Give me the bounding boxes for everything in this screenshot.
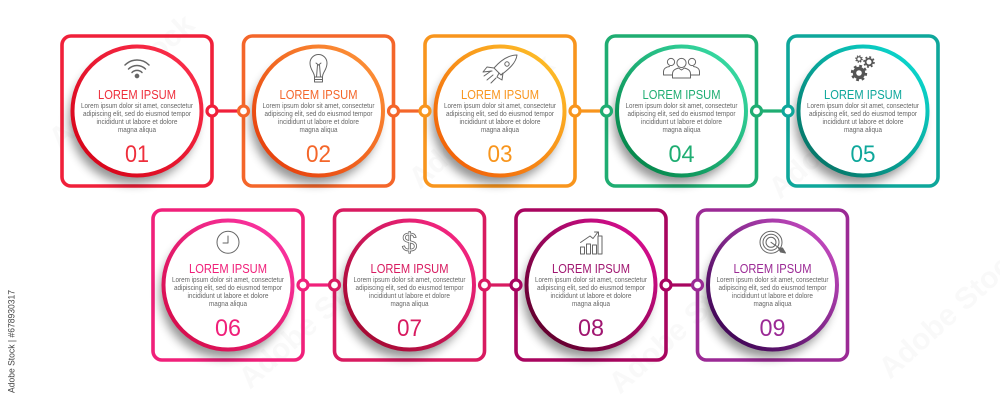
text block 07: magna aliqua — [390, 301, 429, 308]
icon: rocket — [483, 55, 517, 83]
text block 09: adipiscing elit, sed do eiusmod tempor — [718, 285, 827, 292]
connector 07 to 08 — [480, 280, 521, 290]
card frame 01 — [62, 36, 212, 186]
circle shadow 02 — [250, 56, 378, 184]
number 09: 09 — [760, 315, 786, 342]
text block 08 — [535, 277, 648, 308]
number 03: 03 — [488, 141, 512, 168]
icon: dollar: $ — [402, 228, 417, 258]
connector 04 to 05 — [752, 106, 793, 116]
text block 05: incididunt ut labore et dolore — [822, 119, 904, 126]
number 07: 07 — [397, 315, 422, 342]
text block 08: incididunt ut labore et dolore — [550, 293, 632, 300]
text block 01: magna aliqua — [118, 127, 156, 134]
icon: light bulb — [310, 54, 327, 82]
watermark: Adobe Stock — [403, 48, 561, 195]
card frame 08 — [516, 210, 666, 360]
text block 09: Lorem ipsum dolor sit amet, consectetur — [716, 277, 829, 284]
circle ring 02 — [254, 46, 383, 176]
text block 09 — [716, 277, 829, 308]
text block 01 — [81, 103, 194, 134]
panel: step 07 — [334, 210, 484, 360]
text block 02: incididunt ut labore et dolore — [278, 119, 359, 126]
text block 06: incididunt ut labore et dolore — [188, 293, 269, 300]
text block 04: adipiscing elit, sed do eiusmod tempor — [628, 111, 736, 118]
circle shadow 05 — [795, 56, 923, 184]
text block 02: adipiscing elit, sed do eiusmod tempor — [264, 111, 373, 118]
connector 08 to 09 — [661, 280, 702, 290]
circle shadow 07 — [342, 230, 470, 358]
text block 03: Lorem ipsum dolor sit amet, consectetur — [444, 103, 557, 110]
text block 05: adipiscing elit, sed do eiusmod tempor — [809, 111, 918, 118]
heading 04: LOREM IPSUM — [642, 87, 720, 102]
text block 07: adipiscing elit, sed do eiusmod tempor — [356, 285, 464, 292]
circle shadow 09 — [704, 230, 832, 358]
panel: step 03 — [425, 36, 575, 186]
circle ring 09 — [708, 220, 837, 350]
text block 03: incididunt ut labore et dolore — [460, 119, 541, 126]
icon: gears — [852, 56, 874, 80]
card frame 06 — [153, 210, 303, 360]
circle ring 01 — [72, 46, 202, 176]
text block 02: Lorem ipsum dolor sit amet, consectetur — [262, 103, 375, 110]
panel: step 05 — [788, 36, 938, 186]
text block 09: incididunt ut labore et dolore — [732, 293, 813, 300]
heading 01: LOREM IPSUM — [98, 87, 176, 102]
text block 04: magna aliqua — [662, 127, 701, 134]
text block 04: Lorem ipsum dolor sit amet, consectetur — [626, 103, 738, 110]
text block 04: incididunt ut labore et dolore — [641, 119, 722, 126]
circle shadow 03 — [432, 56, 560, 184]
icon: wifi — [125, 60, 149, 78]
circle shadow 08 — [523, 230, 651, 358]
connector 02 to 03 — [388, 106, 430, 116]
heading 05: LOREM IPSUM — [824, 87, 902, 102]
circle ring 06 — [164, 220, 292, 350]
text block 05: magna aliqua — [844, 127, 882, 134]
stock id caption: Adobe Stock | #678930317 — [6, 290, 16, 393]
text block 03 — [444, 103, 557, 134]
circle shadow 01 — [69, 56, 197, 184]
text block 02: magna aliqua — [300, 127, 338, 134]
text block 03: magna aliqua — [481, 127, 519, 134]
text block 07 — [354, 277, 466, 308]
panel: step 09 — [698, 210, 848, 360]
text block 08: adipiscing elit, sed do eiusmod tempor — [537, 285, 646, 292]
heading 02: LOREM IPSUM — [280, 87, 358, 102]
text block 02 — [262, 103, 375, 134]
text block 07: Lorem ipsum dolor sit amet, consectetur — [354, 277, 466, 284]
text block 06: adipiscing elit, sed do eiusmod tempor — [174, 285, 283, 292]
watermark: Adobe Stock — [233, 248, 391, 395]
text block 06 — [172, 277, 285, 308]
connector 01 to 02 — [207, 106, 248, 116]
card frame 03 — [425, 36, 575, 186]
circle ring 07 — [345, 220, 474, 350]
card frame 07 — [334, 210, 484, 360]
text block 03: adipiscing elit, sed do eiusmod tempor — [446, 111, 555, 118]
number 06: 06 — [215, 315, 241, 342]
heading 08: LOREM IPSUM — [552, 261, 630, 276]
number 02: 02 — [306, 141, 331, 168]
icon: growth chart — [580, 232, 602, 254]
connector 06 to 07 — [298, 280, 340, 290]
text block 06: magna aliqua — [209, 301, 247, 308]
watermark: Adobe Stock — [763, 58, 921, 205]
heading 06: LOREM IPSUM — [189, 261, 267, 276]
text block 06: Lorem ipsum dolor sit amet, consectetur — [172, 277, 285, 284]
number 08: 08 — [578, 315, 604, 342]
card frame 02 — [244, 36, 394, 186]
text block 04 — [626, 103, 738, 134]
text block 01: incididunt ut labore et dolore — [96, 119, 178, 126]
text block 01: adipiscing elit, sed do eiusmod tempor — [83, 111, 192, 118]
card frame 09 — [698, 210, 848, 360]
text block 01: Lorem ipsum dolor sit amet, consectetur — [81, 103, 194, 110]
watermark: Adobe Stock — [603, 253, 761, 400]
icon: target — [760, 231, 786, 253]
card frame 05 — [788, 36, 938, 186]
circle shadow 06 — [160, 230, 288, 358]
text block 08: magna aliqua — [572, 301, 610, 308]
circle ring 04 — [617, 46, 746, 176]
panel: step 06 — [153, 210, 303, 360]
text block 09: magna aliqua — [754, 301, 792, 308]
heading 03: LOREM IPSUM — [461, 87, 539, 102]
number 04: 04 — [668, 141, 694, 168]
heading 07: LOREM IPSUM — [370, 261, 448, 276]
text block 08: Lorem ipsum dolor sit amet, consectetur — [535, 277, 648, 284]
number 05: 05 — [850, 141, 876, 168]
connector 03 to 04 — [570, 106, 612, 116]
panel: step 08 — [516, 210, 666, 360]
circle shadow 04 — [614, 56, 742, 184]
icon: clock — [217, 231, 239, 253]
circle ring 05 — [798, 46, 928, 176]
panel: step 01 — [62, 36, 212, 186]
heading 09: LOREM IPSUM — [734, 261, 812, 276]
text block 05: Lorem ipsum dolor sit amet, consectetur — [807, 103, 920, 110]
number 01: 01 — [125, 141, 149, 168]
icon: people — [664, 58, 700, 78]
circle ring 03 — [436, 46, 564, 176]
circle ring 08 — [526, 220, 656, 350]
card frame 04 — [606, 36, 756, 186]
panel: step 02 — [244, 36, 394, 186]
panel: step 04 — [606, 36, 756, 186]
watermark: Adobe Stock — [43, 8, 201, 155]
text block 07: incididunt ut labore et dolore — [369, 293, 450, 300]
text block 05 — [807, 103, 920, 134]
